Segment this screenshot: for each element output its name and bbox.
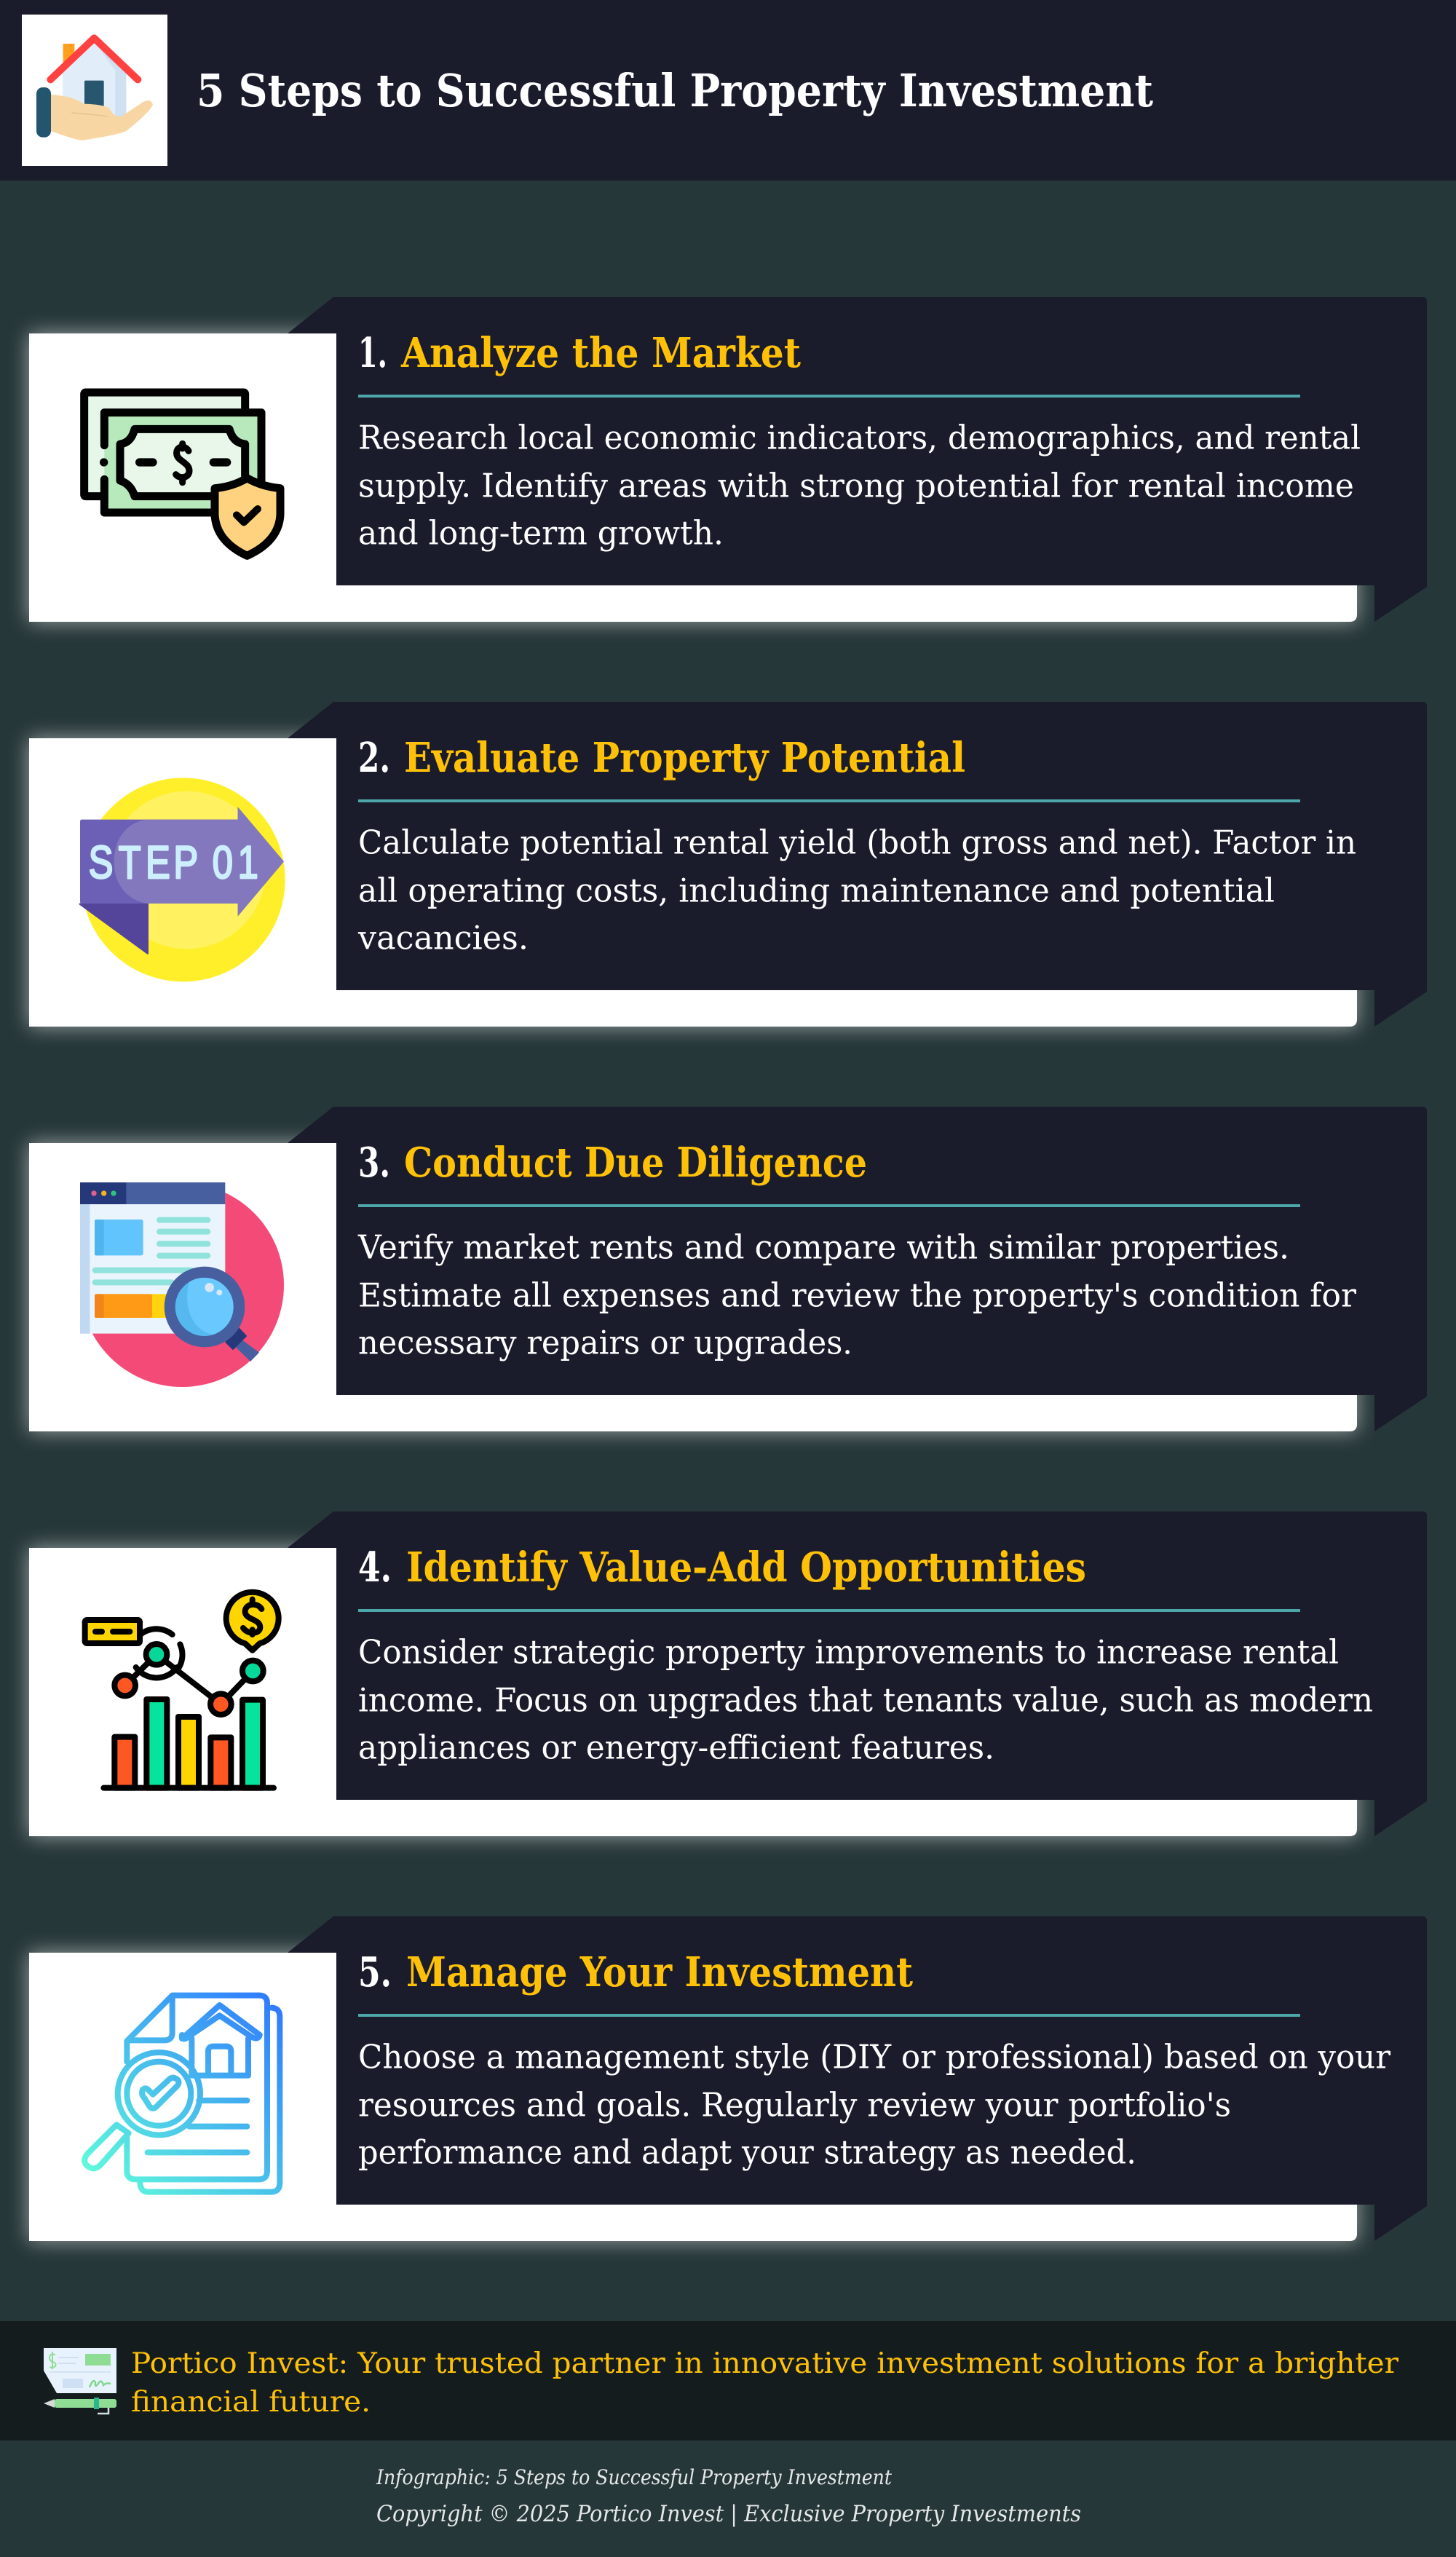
icon: house in hand logo <box>22 15 167 166</box>
text: step 2 body: vacancies. <box>357 919 529 957</box>
header <box>0 0 1456 181</box>
text: step 4 body: Consider strategic property improvements to increase rental <box>358 1632 1339 1672</box>
footer credits: Infographic: 5 Steps to Successful Property Investment <box>376 2465 893 2489</box>
title: 5 Steps to Successful Property Investment <box>197 64 1153 117</box>
heading: step 3: Conduct Due Diligence <box>404 1139 867 1187</box>
text: tagline: financial future. <box>131 2386 371 2419</box>
text: step 3 body: Verify market rents and compare with similar properties. <box>357 1228 1289 1267</box>
heading: step 1: 1. <box>358 329 387 377</box>
text: step 3 body: necessary repairs or upgrades. <box>358 1324 852 1362</box>
text: step 1 body: supply. Identify areas with strong potential for rental income <box>358 466 1354 505</box>
text: step 5 body: performance and adapt your strategy as needed. <box>358 2133 1136 2171</box>
heading: step 5: 5. <box>358 1948 392 1996</box>
text: step 2 body: Calculate potential rental yield (both gross and net). Factor in <box>358 823 1356 862</box>
footer credits <box>376 2465 1081 2527</box>
panel: step 2 <box>29 702 1427 1027</box>
footer credits: Copyright © 2025 Portico Invest | Exclusive Property Investments <box>376 2501 1081 2527</box>
text: step 4 body <box>358 1632 1373 1766</box>
text: step 1 body: Research local economic indicators, demographics, and rental <box>358 418 1361 457</box>
text: step 2 body: all operating costs, including maintenance and potential <box>358 871 1275 910</box>
icon: browser and magnifier <box>80 1182 284 1387</box>
text: step 4 body: appliances or energy-efficient features. <box>358 1728 994 1766</box>
text: step 1 body <box>358 418 1361 552</box>
icon: document with house and magnifier <box>84 1996 280 2192</box>
text: step 1 body: and long-term growth. <box>358 514 724 552</box>
icon: step 01 arrow <box>80 778 285 981</box>
text: step 5 body: resources and goals. Regularly review your portfolio's <box>358 2085 1231 2125</box>
footer banner <box>0 2321 1456 2441</box>
icon: cheque and pen <box>44 2348 116 2414</box>
text: tagline <box>131 2347 1398 2419</box>
text: step 5 body: Choose a management style (DIY or professional) based on your <box>358 2037 1390 2076</box>
panel: step 1 <box>29 297 1427 622</box>
heading: step 5: Manage Your Investment <box>406 1948 913 1996</box>
text: step 5 body <box>358 2037 1390 2171</box>
panel: step 3 <box>29 1107 1427 1431</box>
icon: bar and line chart <box>85 1592 279 1788</box>
panel: step 5 <box>29 1916 1427 2241</box>
heading: step 3: 3. <box>358 1139 390 1187</box>
heading: step 4: Identify Value-Add Opportunities <box>406 1544 1086 1592</box>
text: step 3 body: Estimate all expenses and review the property's condition for <box>358 1276 1356 1315</box>
icon: money and shield <box>84 392 280 556</box>
text: step 2 body <box>357 823 1356 957</box>
text: tagline: Portico Invest: Your trusted partner in innovative investment solutions for a brighter <box>131 2347 1398 2380</box>
heading: step 4: 4. <box>358 1544 392 1592</box>
icon: step 01 arrow: STEP01 <box>89 837 258 888</box>
text: step 3 body <box>357 1228 1356 1362</box>
panel: step 4 <box>29 1511 1427 1836</box>
heading: step 1: Analyze the Market <box>400 329 801 377</box>
heading: step 2: Evaluate Property Potential <box>404 734 965 782</box>
heading: step 2: 2. <box>358 734 390 782</box>
text: step 4 body: income. Focus on upgrades that tenants value, such as modern <box>358 1680 1373 1720</box>
